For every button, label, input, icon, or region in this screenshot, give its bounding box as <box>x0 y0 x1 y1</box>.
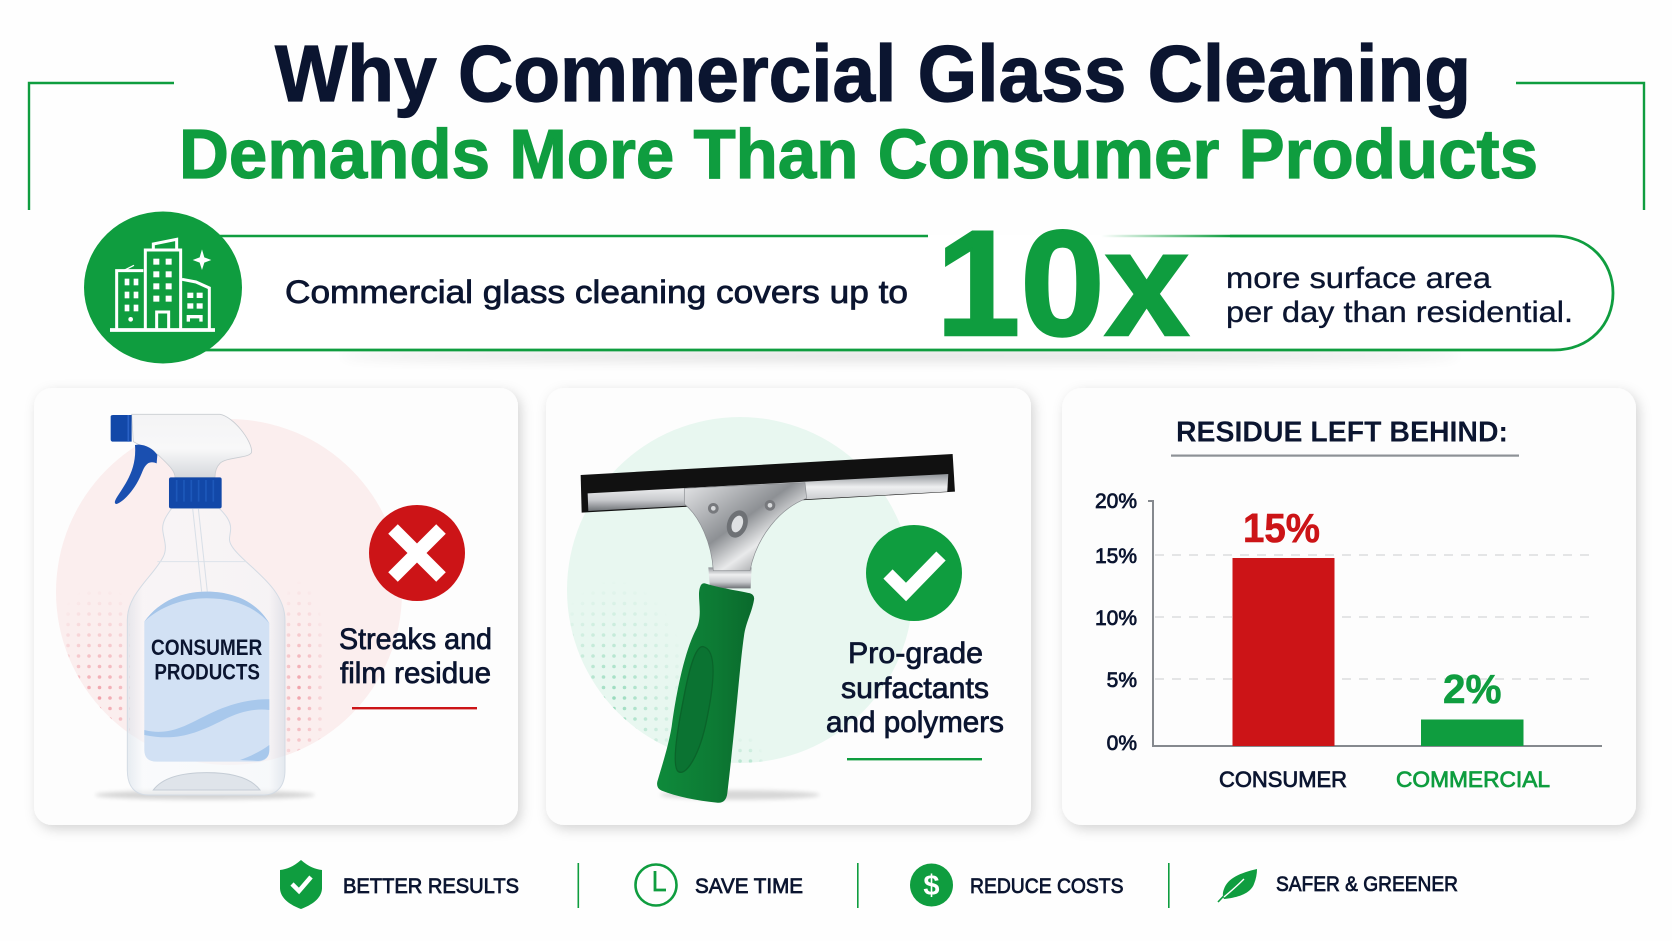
benefit: save time: SAVE TIME <box>695 875 803 898</box>
benefit: better results <box>280 860 519 909</box>
consumer caption <box>339 623 492 690</box>
icon: squeegee <box>581 454 955 803</box>
panel: residue chart <box>1062 388 1636 825</box>
icon: city buildings <box>84 212 242 364</box>
y axis labels: 15% <box>1095 545 1137 568</box>
y axis labels: 0% <box>1107 732 1137 755</box>
commercial caption: and polymers <box>826 706 1004 739</box>
panel: commercial products <box>546 388 1031 825</box>
title line 1: Why Commercial Glass Cleaning <box>275 29 1471 118</box>
banner trailing text: per day than residential. <box>1226 296 1573 329</box>
title line 2: Demands More Than Consumer Products <box>179 115 1538 193</box>
commercial caption <box>826 637 1004 739</box>
icon: shield check <box>280 860 322 909</box>
benefit: reduce costs: REDUCE COSTS <box>970 875 1124 898</box>
bar: commercial 2% <box>1396 666 1550 792</box>
icon: spray bottle <box>95 414 315 800</box>
card background <box>546 388 1031 825</box>
banner lead text: Commercial glass cleaning covers up to <box>285 274 908 310</box>
benefit: better results: BETTER RESULTS <box>343 875 519 898</box>
benefit: safer and greener: SAFER & GREENER <box>1276 873 1458 896</box>
bar: commercial 2%: 2% <box>1443 666 1502 712</box>
card background <box>34 388 518 825</box>
commercial caption: surfactants <box>841 672 989 705</box>
bottle label text <box>151 635 262 684</box>
bar: consumer 15%: 15% <box>1243 505 1320 551</box>
stat banner <box>84 199 1614 367</box>
icon: red x <box>369 505 465 601</box>
bar: consumer 15%: CONSUMER <box>1219 767 1347 792</box>
chart title: RESIDUE LEFT BEHIND: <box>1176 416 1508 448</box>
benefits strip <box>280 860 1458 909</box>
y axis labels: 10% <box>1095 607 1137 630</box>
consumer caption: film residue <box>340 657 491 690</box>
icon: clock <box>636 864 676 906</box>
green circle backdrop <box>567 417 910 763</box>
chart title rule <box>1171 454 1519 457</box>
title <box>179 29 1538 193</box>
bottle label text: PRODUCTS <box>154 659 260 684</box>
bottle label text: CONSUMER <box>151 635 262 660</box>
icon: dollar coin: $ <box>923 870 940 902</box>
big stat 10x: 10x <box>936 199 1189 367</box>
header frame brackets <box>29 83 1644 210</box>
pink circle backdrop <box>50 419 402 775</box>
bar chart <box>1095 490 1602 792</box>
bar: commercial 2%: COMMERCIAL <box>1396 767 1550 792</box>
icon: leaf <box>1218 869 1257 902</box>
icon: green check <box>866 525 962 621</box>
y axis labels: 5% <box>1107 669 1137 692</box>
red underline <box>352 707 477 709</box>
benefit: safer and greener <box>1218 869 1458 902</box>
green underline <box>847 758 982 760</box>
banner pill <box>200 235 1614 361</box>
y axis labels: 20% <box>1095 490 1137 513</box>
benefit: reduce costs <box>910 864 1124 906</box>
benefit: save time <box>636 864 803 906</box>
banner trailing text: more surface area <box>1226 262 1491 295</box>
commercial caption: Pro-grade <box>848 637 983 670</box>
y axis labels <box>1095 490 1137 755</box>
icon: dollar coin <box>910 864 953 906</box>
panel: consumer products <box>34 388 518 825</box>
consumer caption: Streaks and <box>339 623 492 656</box>
bar: consumer 15% <box>1219 505 1347 792</box>
banner trailing text <box>1226 262 1573 329</box>
card background <box>1062 388 1636 825</box>
